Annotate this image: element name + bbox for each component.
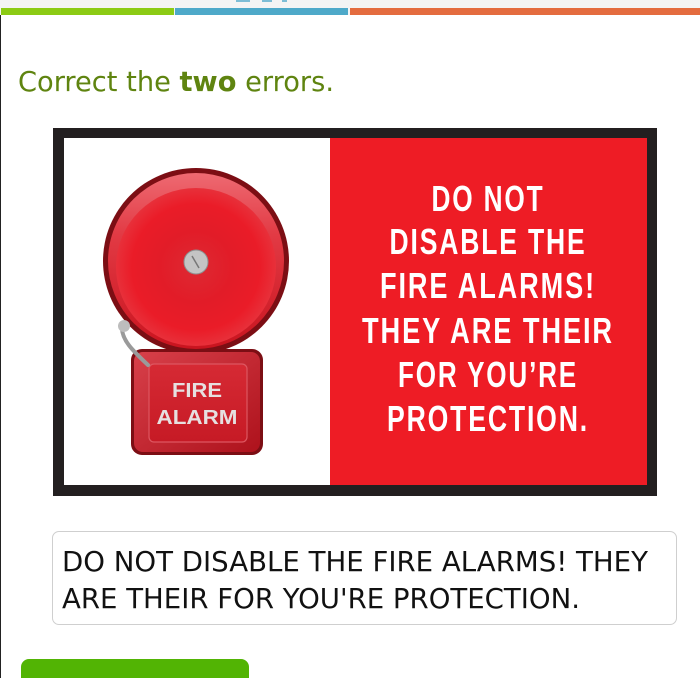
sign message xyxy=(362,178,614,439)
icon: fire alarm bell xyxy=(103,168,289,455)
sign: fire alarm illustration and message xyxy=(53,128,657,496)
sign message: FOR YOU’RE xyxy=(398,354,578,395)
answer text: ARE THEIR FOR YOU'RE PROTECTION. xyxy=(62,582,580,615)
bell housing xyxy=(103,168,289,354)
box label: ALARM xyxy=(156,407,238,429)
box label: FIRE xyxy=(172,380,222,402)
alarm box face xyxy=(149,364,247,442)
box label xyxy=(156,380,238,429)
answer text xyxy=(62,545,649,615)
sign message: PROTECTION. xyxy=(387,398,589,439)
red message panel xyxy=(330,138,647,485)
sign frame xyxy=(53,128,657,496)
answer text box xyxy=(52,531,677,625)
striker arm xyxy=(122,328,148,365)
heading: Correct the two errors. xyxy=(18,65,334,98)
green button xyxy=(21,659,249,678)
alarm box xyxy=(131,349,263,455)
bell screw xyxy=(184,250,208,274)
top progress bar xyxy=(0,0,700,15)
answer text: DO NOT DISABLE THE FIRE ALARMS! THEY xyxy=(62,545,649,578)
left page edge xyxy=(0,0,1,678)
sign message: DISABLE THE xyxy=(390,221,586,262)
sign message: DO NOT xyxy=(432,178,544,219)
white image panel xyxy=(64,138,330,485)
